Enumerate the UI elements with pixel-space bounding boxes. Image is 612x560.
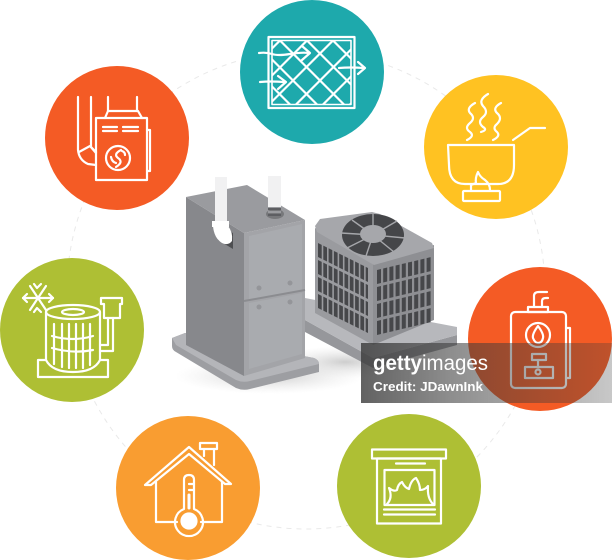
exhaust pipe elbow: [212, 177, 232, 244]
watermark logo text: gettyimages: [373, 352, 488, 375]
icon circle: air conditioning coil: [0, 258, 144, 402]
right vent grille: [377, 264, 431, 328]
illustration: furnace: [172, 176, 365, 394]
icon circle: furnace: [45, 66, 189, 210]
icon circle: pot on stove: [424, 75, 568, 219]
icon circle: fireplace: [337, 414, 481, 558]
icon circle: water heater: [468, 267, 612, 411]
icon circle: air filter: [240, 0, 384, 144]
fan grille: [341, 213, 405, 256]
watermark banner: [361, 343, 612, 403]
left vent grille: [318, 250, 368, 326]
icon circle: home thermostat: [116, 416, 260, 560]
illustration: air conditioner unit: [275, 212, 457, 378]
vent pipe: [266, 176, 284, 219]
watermark credit text: Credit: JDawnInk: [373, 379, 484, 394]
